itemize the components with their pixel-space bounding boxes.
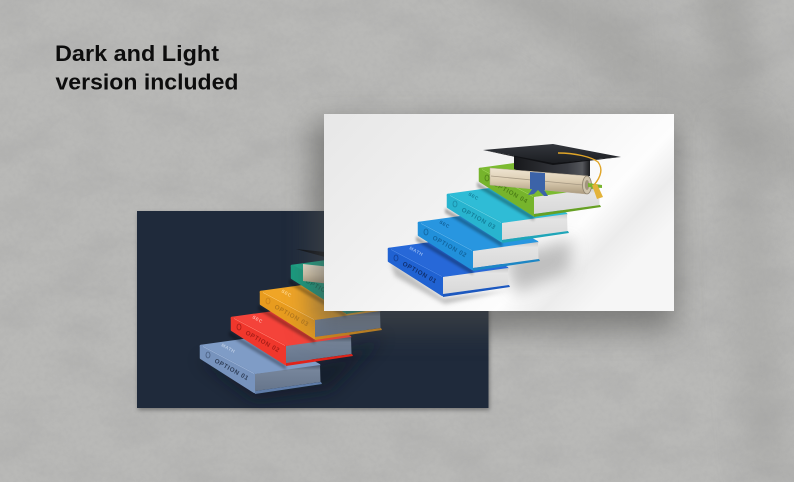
cap edge on dark version xyxy=(296,249,325,257)
dark book 2: red xyxy=(229,309,353,370)
light book 1: blue: MATH xyxy=(409,246,424,257)
panel: dark version xyxy=(137,211,490,410)
light book 2: sky blue: SEC xyxy=(439,220,451,229)
dark book 3: orange xyxy=(258,283,382,344)
light book 2: sky blue xyxy=(416,214,540,275)
dark book 1: slate blue: MATH xyxy=(221,343,236,354)
dark book shadow xyxy=(198,335,385,400)
dark scroll xyxy=(303,264,340,285)
light book 4: green: OPTION 04 xyxy=(492,181,529,205)
heading: version included xyxy=(56,70,238,94)
dark book 2: red: SEC xyxy=(252,315,264,324)
light book 1: blue xyxy=(389,240,510,297)
panel: light version xyxy=(312,114,676,330)
icon: graduation cap xyxy=(483,144,621,180)
dark book 1: slate blue: OPTION 01 xyxy=(213,358,250,382)
dark book 1: slate blue xyxy=(201,337,322,394)
light book 3: teal xyxy=(445,186,569,247)
dark book 4: green: OPTION 04 xyxy=(304,278,341,302)
light book 2: sky blue: OPTION 02 xyxy=(431,235,468,259)
heading xyxy=(55,41,238,94)
icon: diploma scroll xyxy=(490,168,592,196)
light book 4: green xyxy=(477,160,601,221)
light book 1: blue: OPTION 01 xyxy=(401,261,438,285)
light book 3: teal: SEC xyxy=(468,192,480,201)
ribbon xyxy=(528,172,548,196)
dark book 4: green xyxy=(289,257,413,318)
heading: Dark and Light xyxy=(55,41,220,66)
dark book 3: orange: SEC xyxy=(281,289,293,298)
dark book 3: orange: OPTION 03 xyxy=(273,304,310,328)
icon: gold tassel xyxy=(558,153,603,199)
light book shadow xyxy=(390,238,572,304)
light book 3: teal: OPTION 03 xyxy=(460,207,497,231)
dark book 2: red: OPTION 02 xyxy=(244,330,281,354)
